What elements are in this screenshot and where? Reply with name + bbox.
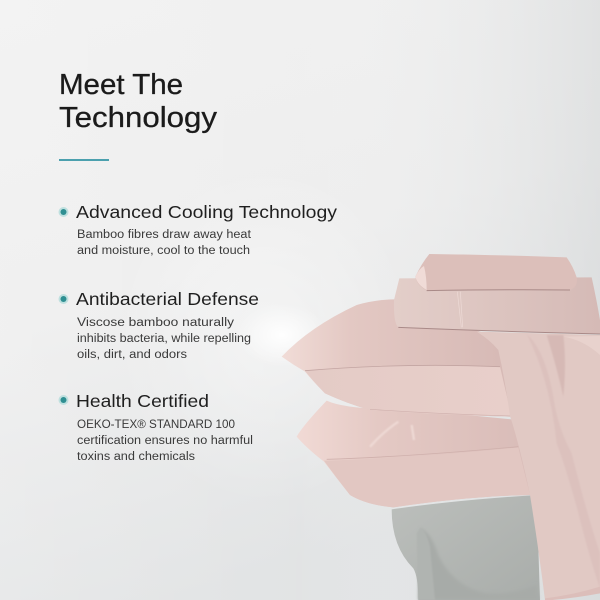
text: health xyxy=(77,419,253,463)
title: Technology xyxy=(59,102,218,134)
title underline xyxy=(59,159,109,161)
text: antibacterial: inhibits bacteria, while repelling xyxy=(77,333,251,345)
feature: health certified xyxy=(58,391,253,463)
text: cooling xyxy=(77,229,252,257)
icon: cooling bullet xyxy=(58,207,68,217)
heading: health: Health Certified xyxy=(76,391,209,411)
icon: antibacterial bullet xyxy=(58,294,68,304)
feature: antibacterial xyxy=(58,289,259,361)
stone stool xyxy=(392,495,540,600)
heading: cooling: Advanced Cooling Technology xyxy=(76,202,337,222)
draped sheet xyxy=(477,332,600,600)
text: cooling: and moisture, cool to the touch xyxy=(77,245,250,257)
icon: health bullet xyxy=(58,395,68,405)
folded sheet lower xyxy=(394,277,600,334)
lower pillow xyxy=(297,401,530,507)
text: cooling: Bamboo fibres draw away heat xyxy=(77,229,252,241)
upper pillow xyxy=(282,299,512,417)
text: antibacterial: oils, dirt, and odors xyxy=(77,349,187,361)
text: health: toxins and chemicals xyxy=(77,451,195,463)
product photo: bedding stack xyxy=(282,254,600,600)
title: Meet The xyxy=(59,69,183,101)
heading: antibacterial: Antibacterial Defense xyxy=(76,289,259,309)
text: antibacterial xyxy=(77,317,251,361)
folded sheet top xyxy=(415,254,577,291)
text: health: OEKO-TEX® STANDARD 100 xyxy=(77,419,235,431)
text: health: certification ensures no harmful xyxy=(77,435,253,447)
feature: cooling xyxy=(58,202,337,257)
title xyxy=(59,69,218,134)
text: antibacterial: Viscose bamboo naturally xyxy=(77,317,234,329)
